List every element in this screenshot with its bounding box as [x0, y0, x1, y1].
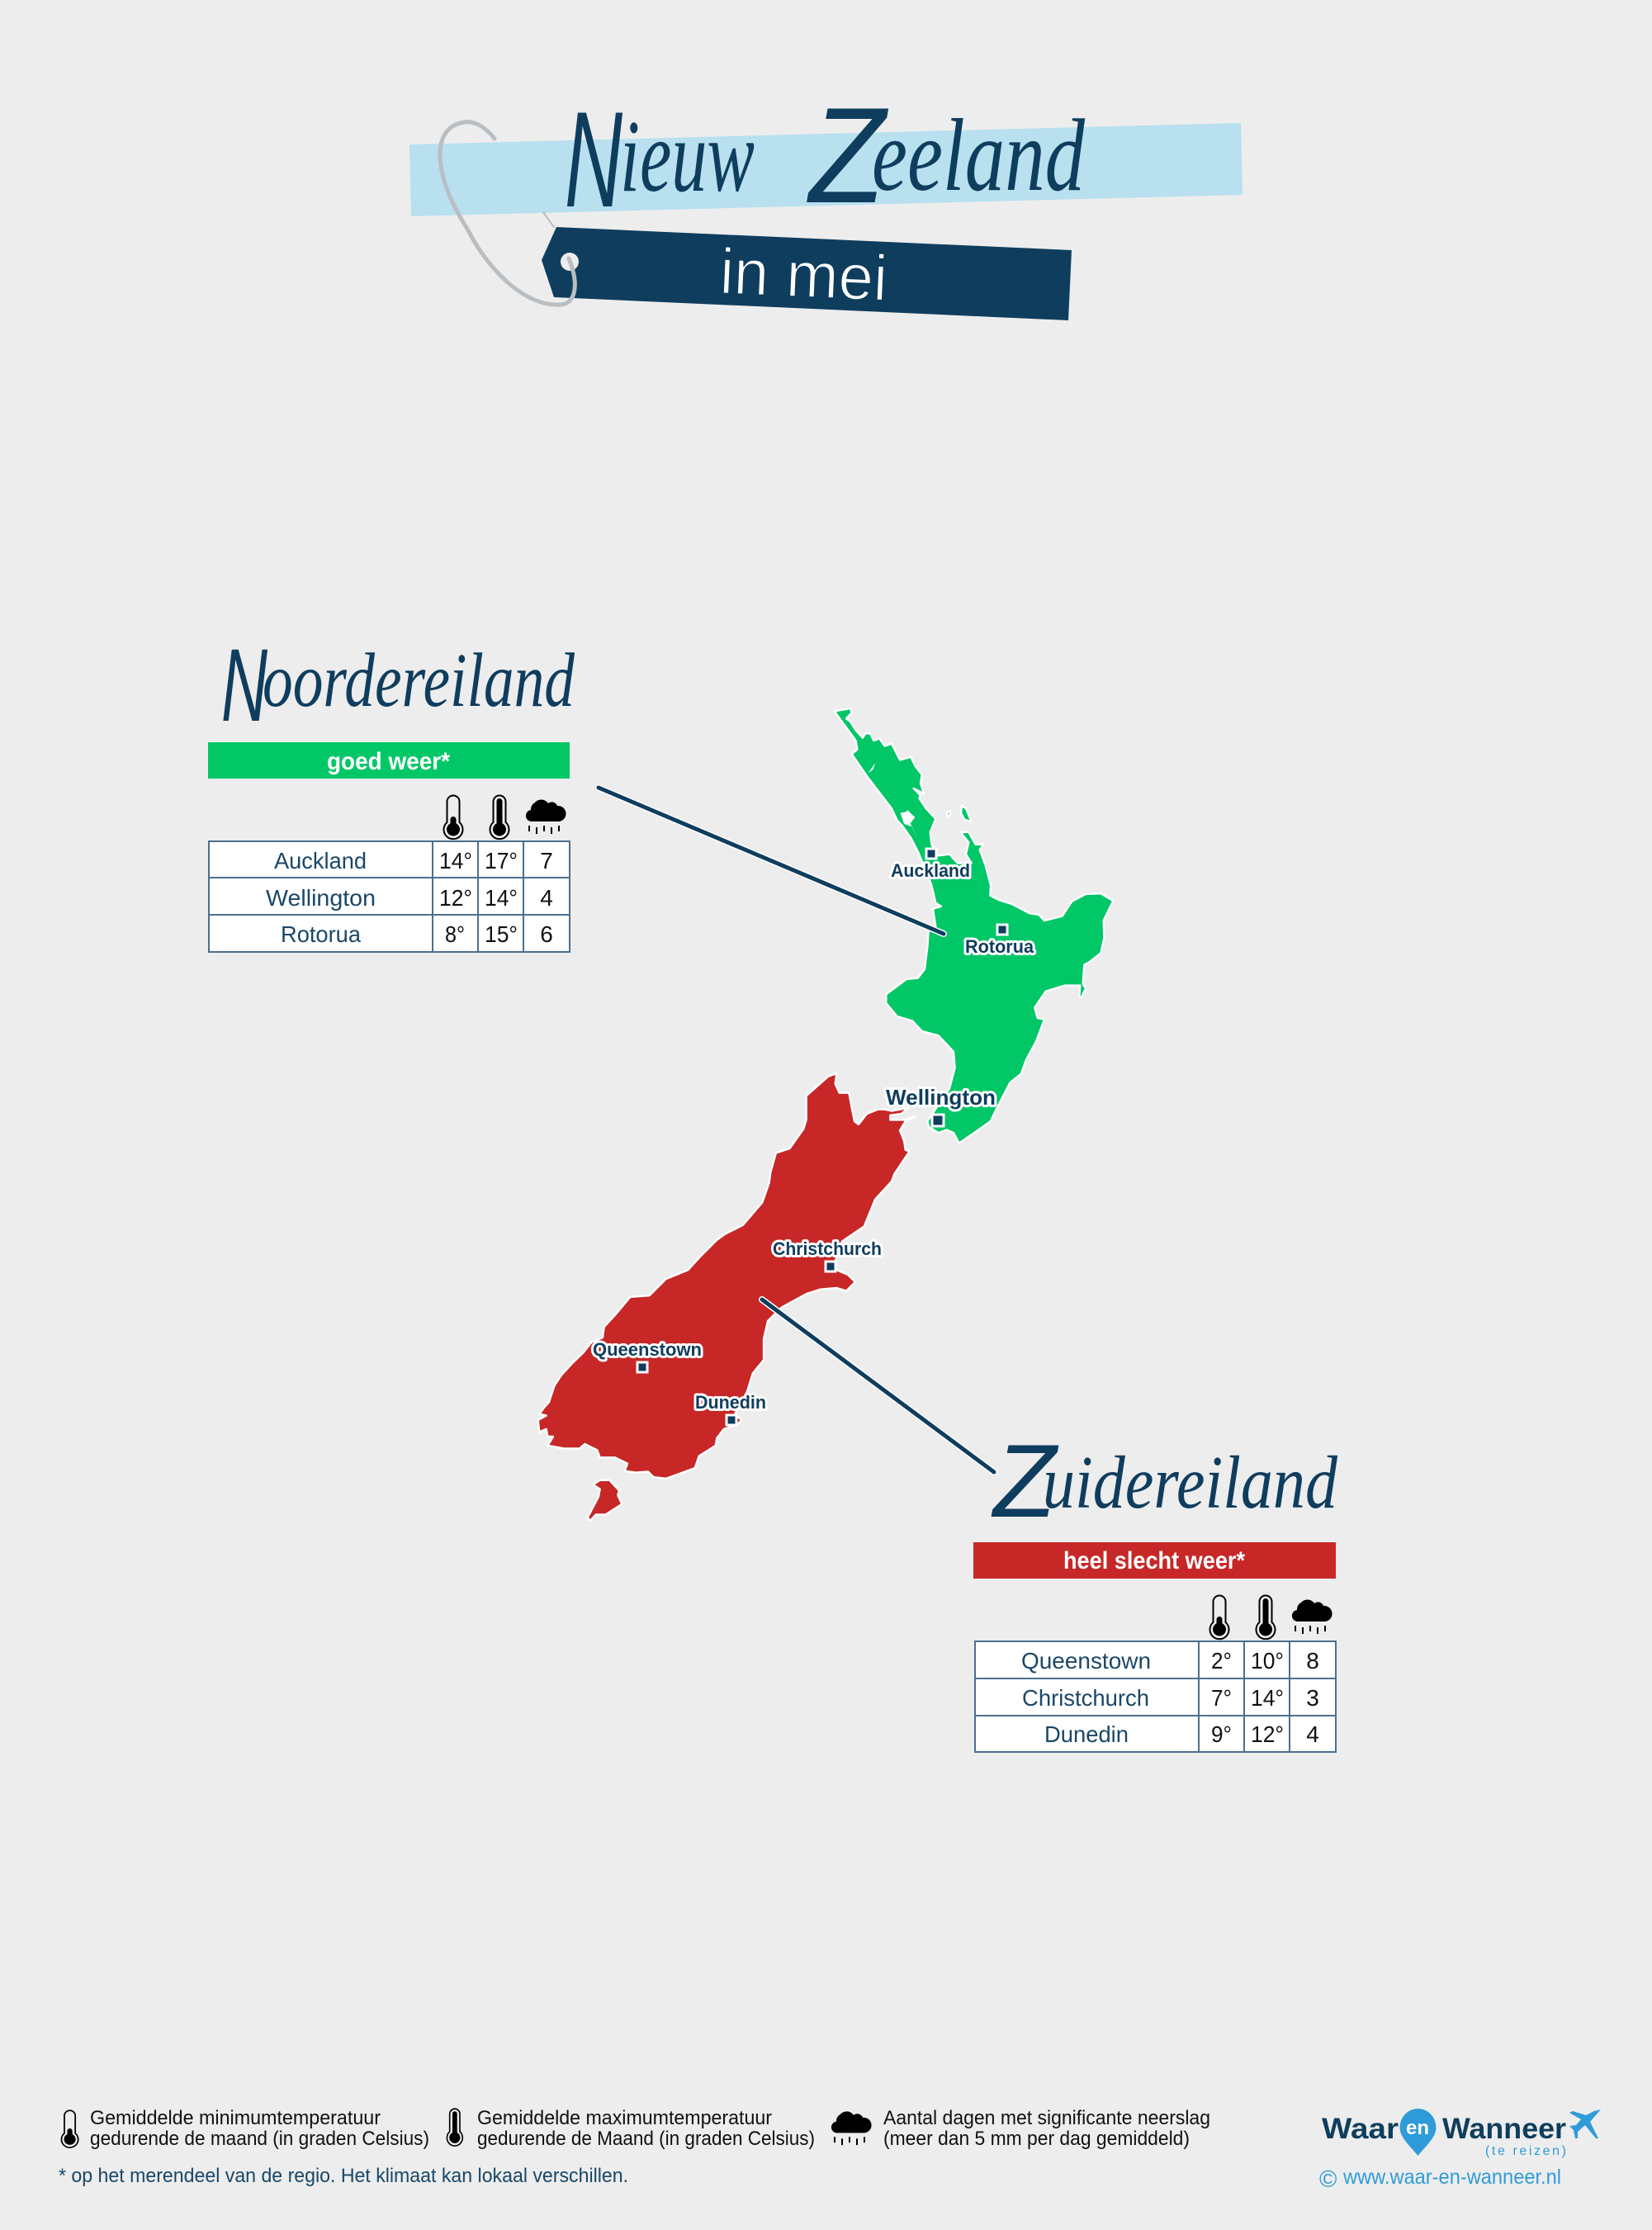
icon: legend maximum temperature [447, 2109, 462, 2146]
climate table north: 14° [439, 848, 472, 874]
climate table north: Auckland [274, 848, 367, 874]
legend text: rain [883, 2107, 1210, 2150]
logo pin [1400, 2109, 1437, 2156]
climate table north: 6 [540, 921, 553, 947]
city label: Queenstown: Queenstown [593, 1339, 702, 1360]
climate table south [975, 1641, 1336, 1752]
legend [59, 2107, 1210, 2187]
legend text: minimum temperature [90, 2107, 429, 2150]
icon: minimum temperature [1210, 1595, 1228, 1639]
climate table north: 12° [439, 885, 472, 911]
North Island [835, 708, 1113, 1143]
copyright: © [1319, 2166, 1337, 2193]
weather rating bar [973, 1542, 1336, 1579]
climate table north: 4 [540, 885, 553, 911]
city marker: Christchurch [826, 1262, 835, 1271]
climate table south: 14° [1251, 1685, 1284, 1711]
title text: ieuw [620, 100, 755, 214]
icon: maximum temperature [490, 796, 509, 839]
legend text: rain: (meer dan 5 mm per dag gemiddeld) [883, 2128, 1190, 2150]
icon: plane [1569, 2109, 1601, 2138]
climate table south: 8 [1306, 1648, 1319, 1674]
climate table north: 7 [540, 848, 553, 874]
legend text: maximum temperature: gedurende de Maand (in graden Celsius) [477, 2128, 815, 2150]
climate table north: Rotorua [281, 921, 361, 947]
heading: Zuidereiland: uidereiland [1043, 1441, 1337, 1524]
icon: legend rain [831, 2111, 872, 2145]
icon: rain [526, 799, 566, 834]
title band [409, 123, 1243, 216]
leader line north [599, 788, 944, 934]
footnote: * op het merendeel van de regio. Het klimaat kan lokaal verschillen. [59, 2165, 628, 2187]
heading: Zuidereiland: Z [991, 1424, 1059, 1539]
weather rating bar: goed weer* [327, 748, 450, 775]
tag string [440, 122, 575, 305]
tag subtitle band [542, 227, 1072, 320]
panel: Zuidereiland [973, 1424, 1337, 1752]
title block [409, 79, 1243, 320]
climate table south: Queenstown [1021, 1648, 1151, 1674]
city marker: Rotorua [997, 925, 1007, 935]
climate table south: 7° [1211, 1685, 1232, 1711]
weather rating bar: heel slecht weer* [1063, 1547, 1245, 1574]
city label: Christchurch: Christchurch [773, 1238, 882, 1259]
heading: Noordereiland [221, 628, 575, 743]
leader line south [762, 1300, 994, 1472]
climate table north: 15° [485, 921, 518, 947]
icon: maximum temperature [1257, 1595, 1275, 1639]
climate table south: 12° [1251, 1721, 1284, 1747]
logo word: Waar: Waar [1322, 2113, 1399, 2145]
icon: rain [1292, 1599, 1332, 1634]
logo: Waar en Wanneer [1319, 2109, 1601, 2193]
climate table north [209, 841, 570, 952]
climate table south: Dunedin [1044, 1721, 1129, 1747]
climate table south: 2° [1211, 1648, 1232, 1674]
city marker: Auckland [926, 849, 936, 859]
climate table south: 3 [1306, 1685, 1319, 1711]
legend text: minimum temperature: Gemiddelde minimumtemperatuur [90, 2107, 381, 2129]
heading: Zuidereiland [991, 1424, 1337, 1539]
city label: Wellington: Wellington [886, 1085, 996, 1110]
logo tagline: (te reizen) [1485, 2144, 1566, 2158]
climate table north: 8° [445, 921, 465, 947]
heading: Noordereiland: N [221, 628, 267, 743]
city label: Dunedin: Dunedin [695, 1392, 766, 1413]
climate table north: 14° [485, 885, 518, 911]
city marker: Queenstown [637, 1362, 647, 1372]
city label: Rotorua: Rotorua [965, 936, 1034, 957]
legend text: maximum temperature: Gemiddelde maximumtemperatuur [477, 2107, 772, 2129]
website url: www.waar-en-wanneer.nl [1342, 2166, 1561, 2189]
logo word: Wanneer: Wanneer [1442, 2113, 1566, 2145]
panel: Noordereiland [208, 628, 575, 952]
city marker: Dunedin [727, 1415, 736, 1425]
climate table south: 9° [1211, 1721, 1232, 1747]
South Island [538, 1073, 915, 1521]
climate table south: 10° [1251, 1648, 1284, 1674]
legend text: minimum temperature: gedurende de maand (in graden Celsius) [90, 2128, 429, 2150]
climate table north: Wellington [266, 885, 376, 911]
title text: Z [806, 79, 889, 231]
logo word: en: en [1406, 2117, 1429, 2139]
icon: minimum temperature [444, 796, 462, 839]
title text: N [565, 83, 622, 235]
city label: Auckland: Auckland [891, 860, 970, 881]
weather rating bar [208, 742, 570, 779]
climate table south: 4 [1306, 1721, 1319, 1747]
icon: legend minimum temperature [61, 2110, 78, 2147]
title text: eeland [872, 99, 1085, 213]
heading: Noordereiland: oordereiland [263, 638, 575, 723]
legend text: rain: Aantal dagen met significante neerslag [883, 2107, 1210, 2129]
legend text: maximum temperature [477, 2107, 815, 2150]
subtitle text: in mei [718, 234, 889, 315]
title text [565, 79, 1085, 235]
climate table south: Christchurch [1022, 1685, 1149, 1711]
climate table north: 17° [485, 848, 518, 874]
map of New Zealand [538, 708, 1113, 1521]
tag hole [561, 253, 579, 271]
city marker: Wellington [932, 1115, 944, 1126]
